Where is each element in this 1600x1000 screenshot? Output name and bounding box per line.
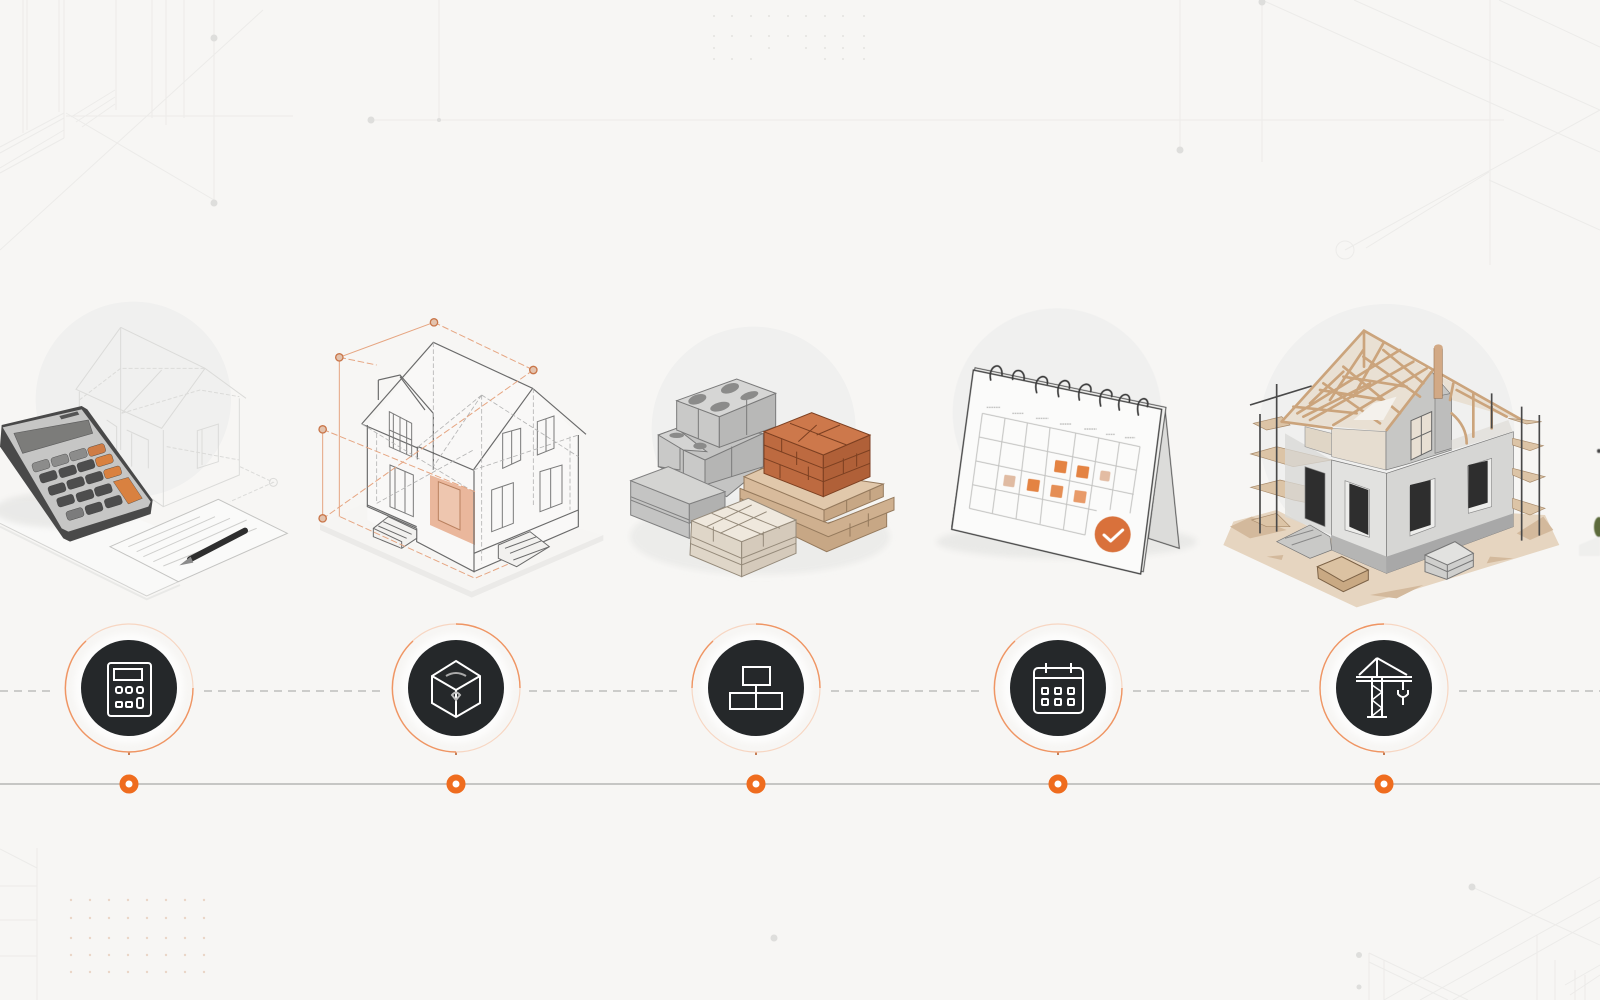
wireframe house bbox=[76, 327, 277, 507]
illustration: house blueprint bbox=[319, 319, 603, 598]
entry steps bbox=[1277, 525, 1332, 558]
notes sheet bbox=[110, 499, 287, 582]
dimension markers bbox=[319, 319, 537, 522]
illustration: next stage, cropped at right edge bbox=[1579, 449, 1600, 556]
step 1 timeline dot bbox=[122, 778, 136, 790]
chimney bbox=[1434, 348, 1442, 398]
weekday labels bbox=[987, 407, 1135, 438]
roof trusses bbox=[1282, 331, 1525, 443]
house wall fill bbox=[367, 342, 578, 572]
binder rings bbox=[990, 366, 1148, 415]
step 4 timeline dot bbox=[1052, 778, 1064, 790]
step 5 timeline dot bbox=[1378, 778, 1390, 790]
step 2 timeline dot bbox=[450, 778, 462, 790]
calculator bbox=[0, 406, 153, 542]
calendar stand bbox=[1148, 408, 1179, 548]
base platform bbox=[320, 482, 603, 592]
timeline axis bbox=[0, 783, 1600, 785]
step 2 marker bbox=[392, 624, 520, 755]
orange dimension lines bbox=[323, 322, 533, 578]
step 1 marker bbox=[65, 624, 193, 755]
dashed connector bbox=[0, 690, 1600, 692]
calendar page bbox=[952, 368, 1166, 572]
illustration: desk calendar bbox=[937, 308, 1197, 574]
grey slab stack bbox=[631, 467, 725, 538]
illustration: calculator and budget papers bbox=[0, 302, 287, 599]
pen bbox=[190, 531, 245, 559]
calendar grid bbox=[969, 413, 1140, 535]
timber pallet bbox=[1317, 557, 1368, 592]
front steps bbox=[373, 517, 549, 567]
concrete blocks bbox=[658, 379, 776, 497]
icon: hierarchy blocks bbox=[730, 667, 782, 709]
block pallet bbox=[1425, 542, 1473, 579]
highlighted days bbox=[1003, 460, 1111, 503]
illustration: house under construction bbox=[1223, 304, 1559, 607]
upper storey bbox=[1332, 428, 1386, 470]
windows bbox=[1305, 412, 1492, 537]
icon: calculator bbox=[108, 663, 151, 716]
step 4 marker bbox=[994, 624, 1122, 755]
trusses back fill bbox=[1282, 331, 1525, 432]
confirmation badge bbox=[1095, 516, 1131, 552]
construction site ground bbox=[1223, 510, 1559, 607]
icon: 3d cube bbox=[432, 661, 480, 717]
clay bricks bbox=[764, 413, 870, 497]
orange wall panel bbox=[430, 475, 475, 545]
icon: tower crane bbox=[1356, 658, 1412, 717]
right scaffold bbox=[1492, 393, 1545, 541]
step 3 marker bbox=[692, 624, 820, 755]
house windows bbox=[389, 412, 562, 532]
house outline bbox=[362, 342, 586, 572]
left scaffold bbox=[1250, 384, 1332, 533]
tan timber pallet bbox=[740, 467, 894, 552]
paper sheet bbox=[0, 500, 178, 596]
icon: calendar bbox=[1034, 663, 1083, 713]
ground floor walls bbox=[1285, 433, 1332, 535]
step 5 marker bbox=[1320, 624, 1448, 755]
illustration: building materials bbox=[630, 327, 894, 577]
pale block stack bbox=[690, 498, 796, 577]
step 3 timeline dot bbox=[750, 778, 762, 790]
